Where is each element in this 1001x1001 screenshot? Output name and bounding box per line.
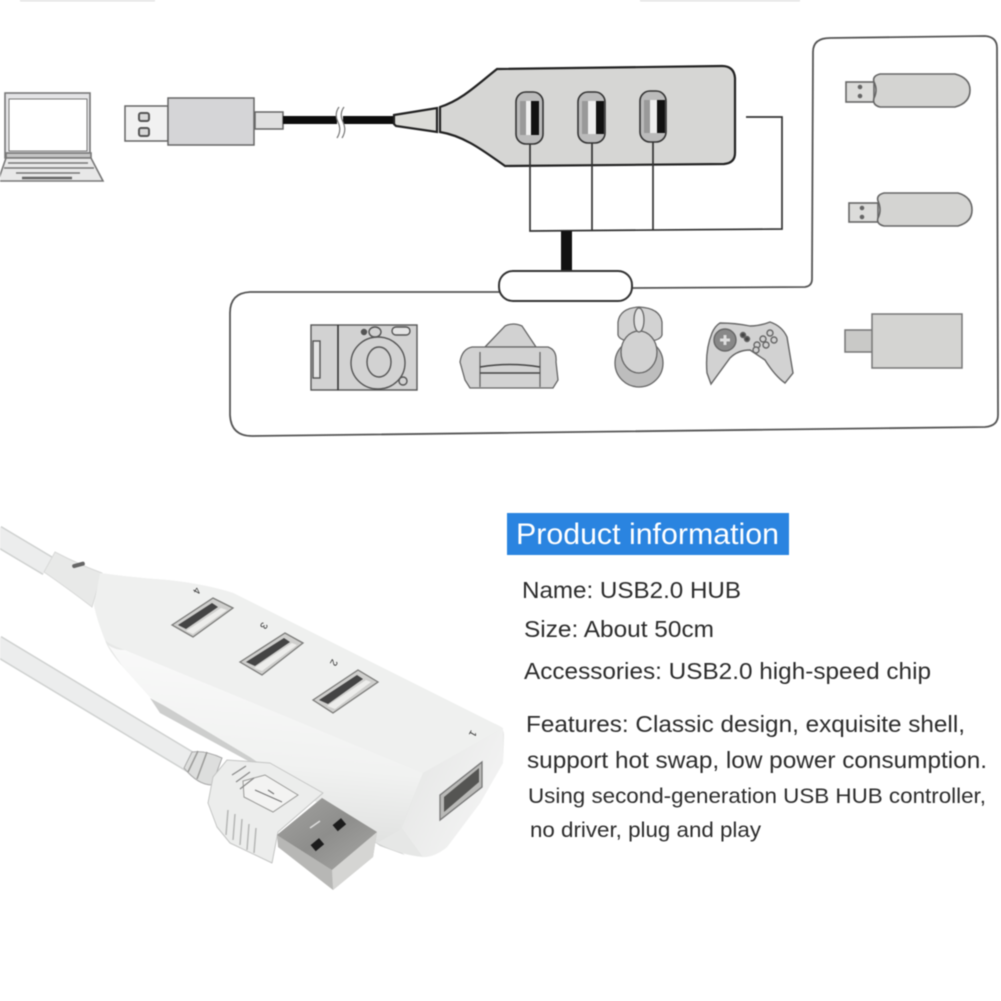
product photo: white USB hub bbox=[0, 535, 504, 890]
USB port 4 bbox=[172, 598, 233, 637]
hub front highlight band bbox=[108, 645, 423, 843]
port numbers: 3 bbox=[257, 620, 269, 631]
hub lower foot shadow bbox=[150, 698, 405, 855]
text block: specifications: Using second-generation USB HUB controller, bbox=[528, 785, 986, 808]
port 1 bbox=[516, 92, 543, 144]
icon: printer-shaped device bbox=[460, 324, 558, 388]
port numbers bbox=[190, 585, 478, 739]
icon: laptop bbox=[0, 93, 103, 181]
port numbers: 1 bbox=[466, 728, 478, 739]
hub body bbox=[94, 573, 504, 857]
icon: camera bbox=[311, 325, 417, 390]
cable with break mark bbox=[283, 107, 394, 139]
text block: specifications: Accessories: USB2.0 high-speed chip bbox=[524, 658, 931, 684]
port 3 bbox=[640, 91, 666, 142]
hub top face bbox=[94, 573, 503, 773]
device enclosure outline bbox=[230, 36, 998, 436]
USB port 2 bbox=[313, 670, 378, 713]
icon: mouse bbox=[615, 307, 663, 387]
hub switch pill bbox=[499, 271, 632, 301]
port numbers: 4 bbox=[190, 585, 202, 596]
icon: USB flash drive 1 bbox=[846, 74, 970, 107]
USB plug strain relief bbox=[184, 751, 222, 785]
hub diagram body bbox=[394, 66, 735, 166]
USB plug housing bbox=[208, 760, 323, 863]
USB plug cable bbox=[0, 645, 192, 763]
hub power cable bbox=[0, 535, 48, 566]
text block: specifications: Size: About 50cm bbox=[524, 616, 714, 642]
text block: specifications: support hot swap, low power consumption. bbox=[527, 747, 987, 773]
connector lines bbox=[530, 117, 782, 271]
text block: specifications bbox=[522, 577, 987, 842]
USB port 3 bbox=[240, 633, 303, 675]
hub strain relief collar bbox=[44, 552, 102, 607]
text block: specifications: Name: USB2.0 HUB bbox=[522, 577, 741, 603]
port numbers: 2 bbox=[327, 657, 339, 668]
heading: product information: Product information bbox=[516, 518, 779, 551]
connection diagram bbox=[0, 36, 998, 436]
USB plug metal tip bbox=[277, 798, 377, 890]
USB port 1 bbox=[440, 762, 482, 820]
icon: card reader bbox=[845, 314, 962, 368]
hub end cap bbox=[402, 728, 503, 857]
text block: specifications: no driver, plug and play bbox=[530, 819, 762, 842]
port 2 bbox=[578, 92, 605, 143]
icon: game controller bbox=[707, 322, 793, 384]
icon: USB plug bbox=[125, 98, 283, 145]
text block: specifications: Features: Classic design, exquisite shell, bbox=[526, 711, 965, 737]
icon: USB flash drive 2 bbox=[849, 193, 972, 226]
